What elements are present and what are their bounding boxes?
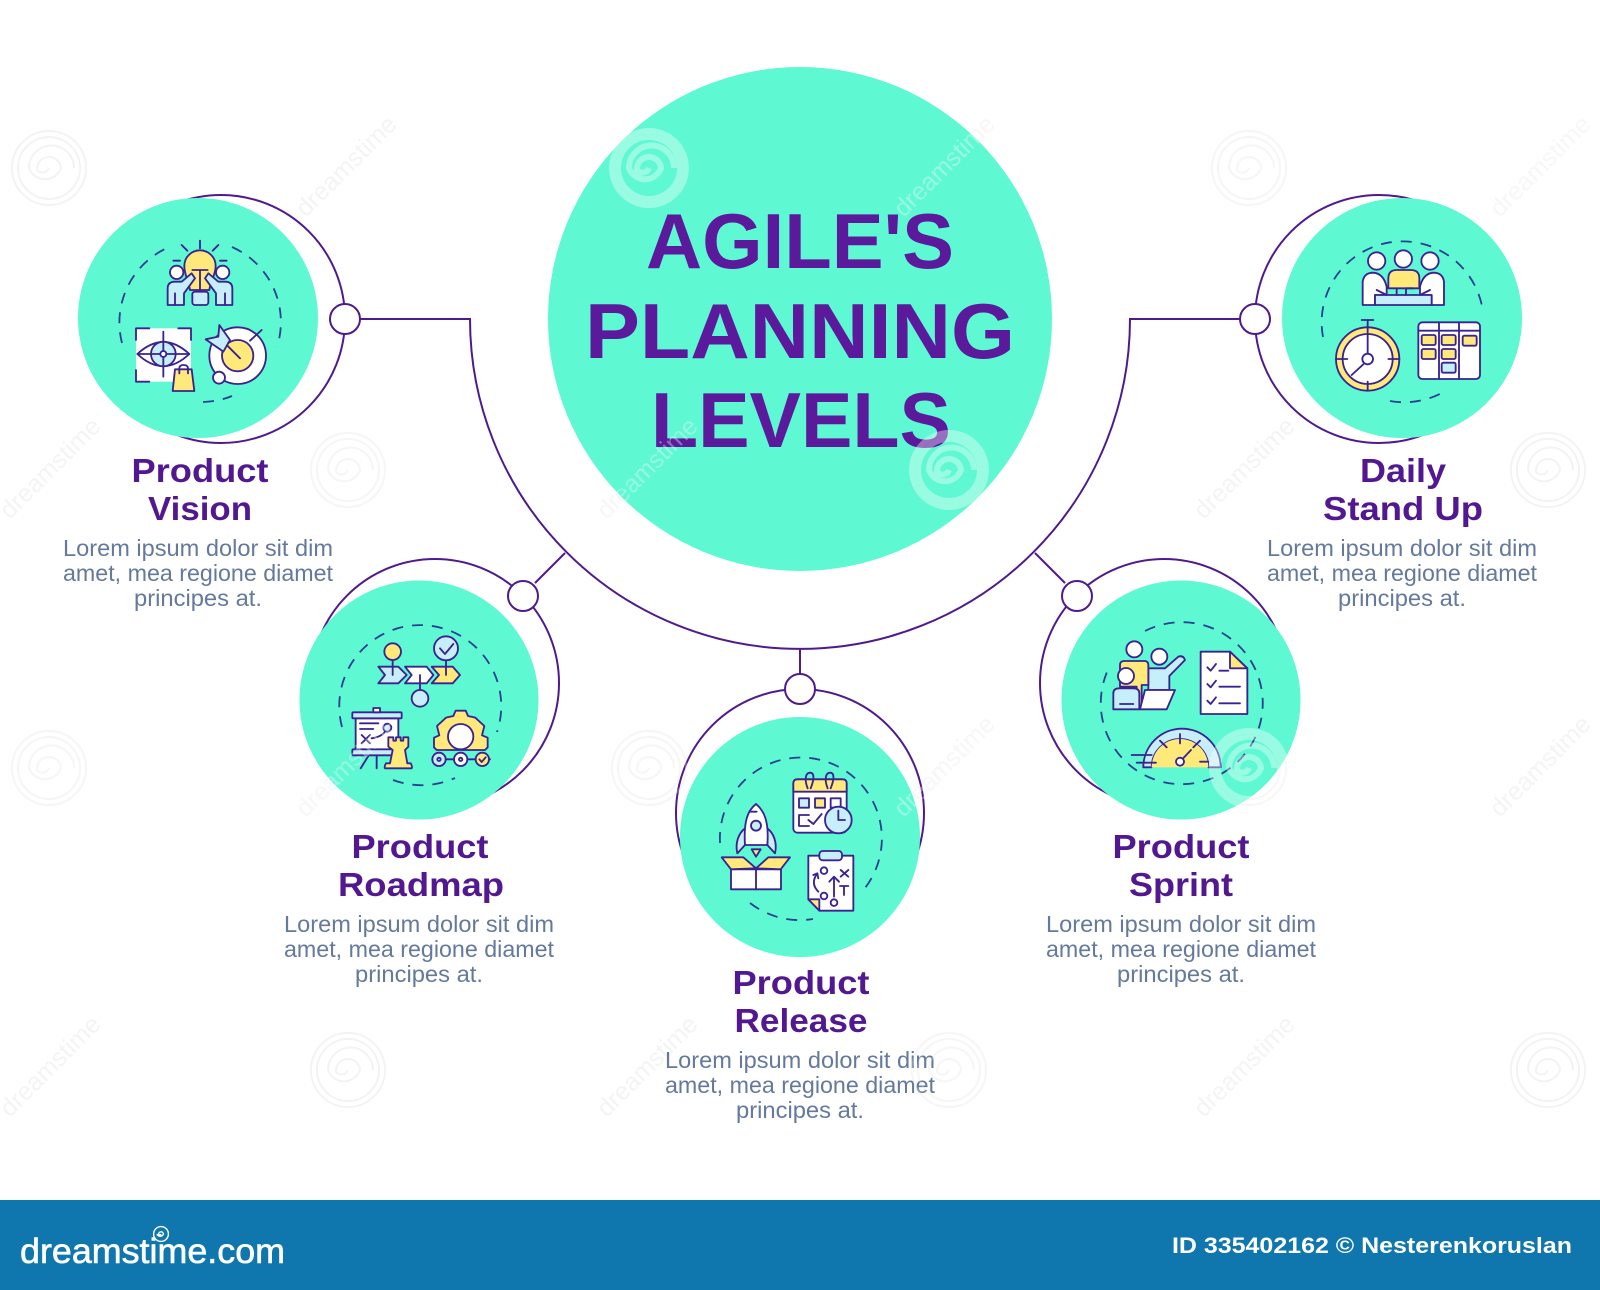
body text <box>63 535 334 611</box>
body text: amet, mea regione diamet <box>284 936 555 962</box>
heading: product vision: Product <box>132 452 269 489</box>
heading: product release: Product <box>732 964 870 1001</box>
body text: principes at. <box>1338 585 1466 611</box>
heading line 2: Roadmap <box>338 866 504 903</box>
body text: amet, mea regione diamet <box>665 1072 936 1098</box>
text: dreamstime <box>290 710 402 822</box>
body text: amet, mea regione diamet <box>63 560 334 586</box>
heading line 2: Vision <box>148 490 252 527</box>
body text: amet, mea regione diamet <box>1267 560 1538 586</box>
text: dreamstime <box>290 710 402 822</box>
body text: principes at. <box>134 585 262 611</box>
panel: daily stand up <box>1240 195 1538 611</box>
panel: product release <box>665 674 936 1123</box>
body text: Lorem ipsum dolor sit dim <box>1046 911 1316 937</box>
title: PLANNING <box>585 287 1015 375</box>
text: dreamstime <box>1484 110 1596 222</box>
body text <box>1267 535 1538 611</box>
body text: principes at. <box>355 961 483 987</box>
panel: product sprint <box>1040 559 1317 987</box>
icon: product vision <box>136 241 266 391</box>
image credit: ID 335402162 © Nesterenkoruslan <box>1172 1233 1572 1258</box>
text: dreamstime <box>1484 110 1596 222</box>
text: dreamstime <box>591 1010 703 1122</box>
body text <box>1046 911 1317 987</box>
heading: product roadmap: Product <box>352 828 489 865</box>
text: dreamstime <box>290 110 402 222</box>
body text: principes at. <box>1117 961 1245 987</box>
icon: product sprint <box>1113 641 1247 767</box>
title: LEVELS <box>651 376 951 464</box>
title <box>585 197 1015 464</box>
icon: product release <box>722 773 853 911</box>
body text: amet, mea regione diamet <box>1046 936 1317 962</box>
connector: big arc linking all levels <box>360 319 1240 674</box>
text: dreamstime <box>1188 412 1300 524</box>
heading: product sprint: Product <box>1112 828 1250 865</box>
text: dreamstime <box>1188 1010 1300 1122</box>
icon: product roadmap <box>352 636 490 768</box>
text: dreamstime <box>888 710 1000 822</box>
body text: Lorem ipsum dolor sit dim <box>63 535 333 561</box>
body text: Lorem ipsum dolor sit dim <box>1267 535 1537 561</box>
text: dreamstime <box>1484 710 1596 822</box>
body text: Lorem ipsum dolor sit dim <box>665 1047 935 1073</box>
heading: daily stand up: Daily <box>1360 452 1447 489</box>
heading line 2: Release <box>734 1002 868 1039</box>
body text: Lorem ipsum dolor sit dim <box>284 911 554 937</box>
body text <box>665 1047 936 1123</box>
text: dreamstime <box>888 110 1000 222</box>
heading line 2: Stand Up <box>1323 490 1483 527</box>
text: dreamstime <box>888 710 1000 822</box>
text: dreamstime <box>888 110 1000 222</box>
logo: dreamstime: dreamstime.com <box>20 1232 285 1271</box>
footer bar <box>0 1200 1600 1290</box>
icon: daily stand up <box>1336 250 1480 391</box>
heading line 2: Sprint <box>1129 866 1233 903</box>
text: dreamstime <box>591 412 703 524</box>
title: AGILE'S <box>646 197 954 285</box>
panel: product vision <box>63 195 360 611</box>
panel: product roadmap <box>284 559 559 987</box>
central circle with title <box>548 67 1052 571</box>
body text: principes at. <box>736 1097 864 1123</box>
text: dreamstime <box>591 412 703 524</box>
body text <box>284 911 555 987</box>
